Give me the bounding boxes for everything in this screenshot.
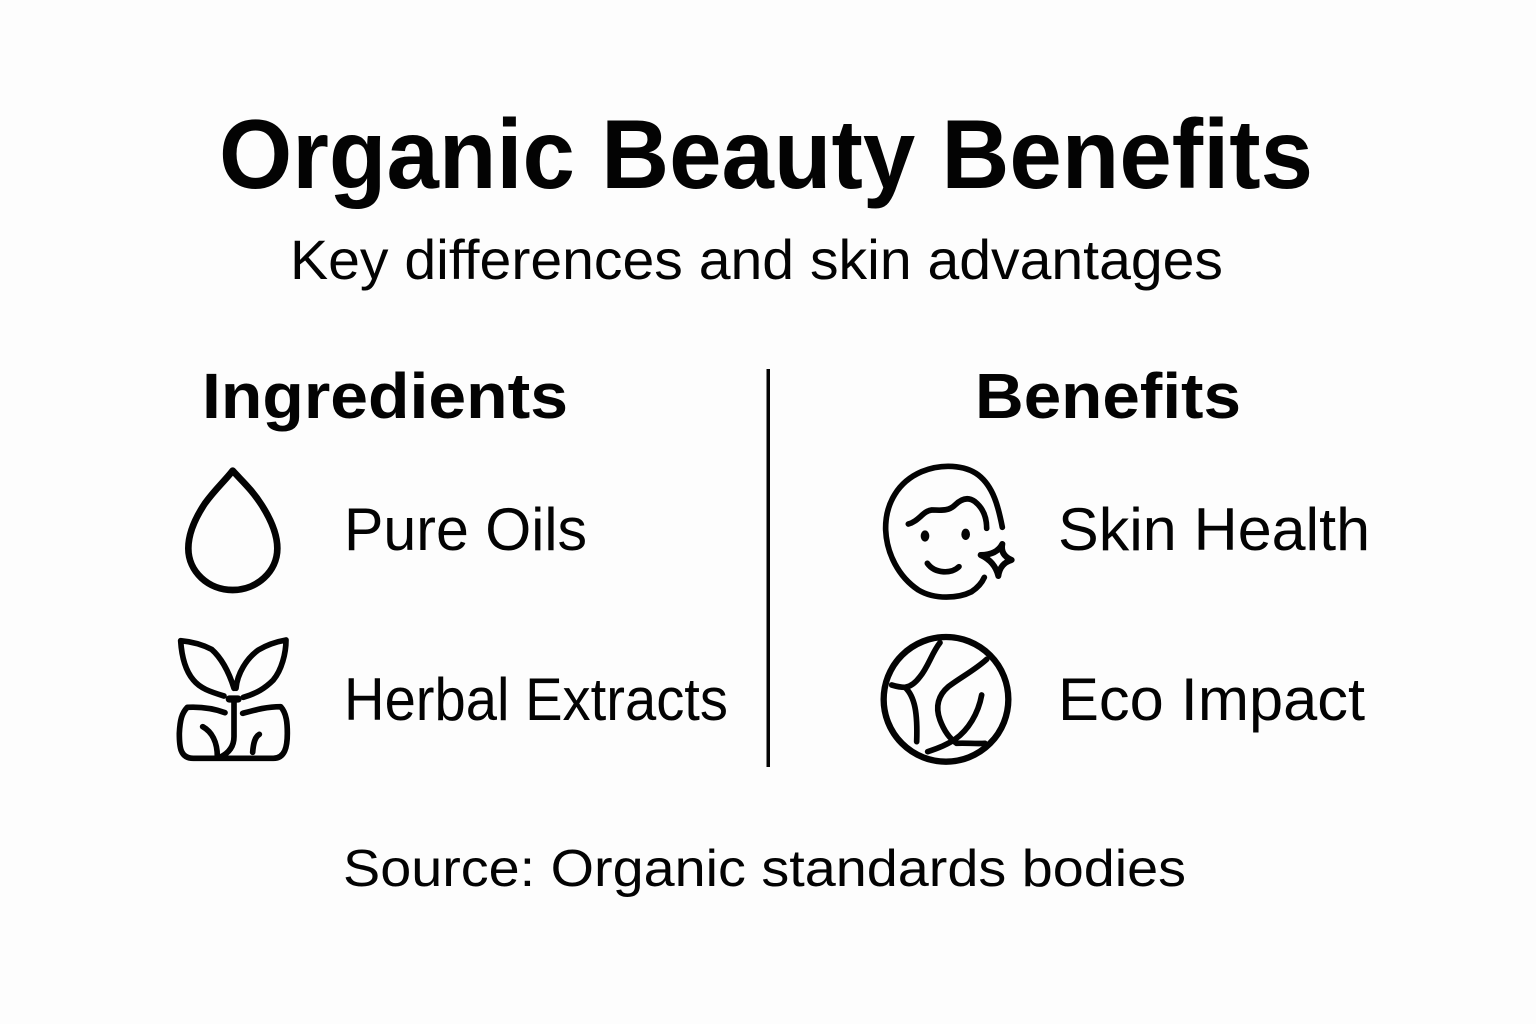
title: Organic Beauty Benefits — [219, 99, 1313, 209]
label: eco impact: Eco Impact — [1058, 666, 1365, 733]
icon: oil drop — [188, 471, 277, 590]
label: skin health: Skin Health — [1058, 496, 1370, 563]
icon: herbal plant — [179, 640, 287, 758]
label: pure oils: Pure Oils — [344, 496, 587, 563]
heading: ingredients: Ingredients — [202, 360, 568, 432]
panel: ingredients — [179, 360, 728, 758]
label: herbal extracts: Herbal Extracts — [344, 666, 728, 733]
source note: Source: Organic standards bodies — [343, 840, 1186, 898]
subtitle: Key differences and skin advantages — [290, 228, 1223, 291]
panel: benefits — [884, 360, 1370, 762]
icon: eco globe — [884, 637, 1008, 762]
icon: face with sparkle — [886, 466, 1012, 597]
heading: benefits: Benefits — [975, 360, 1241, 432]
center divider — [766, 369, 770, 767]
